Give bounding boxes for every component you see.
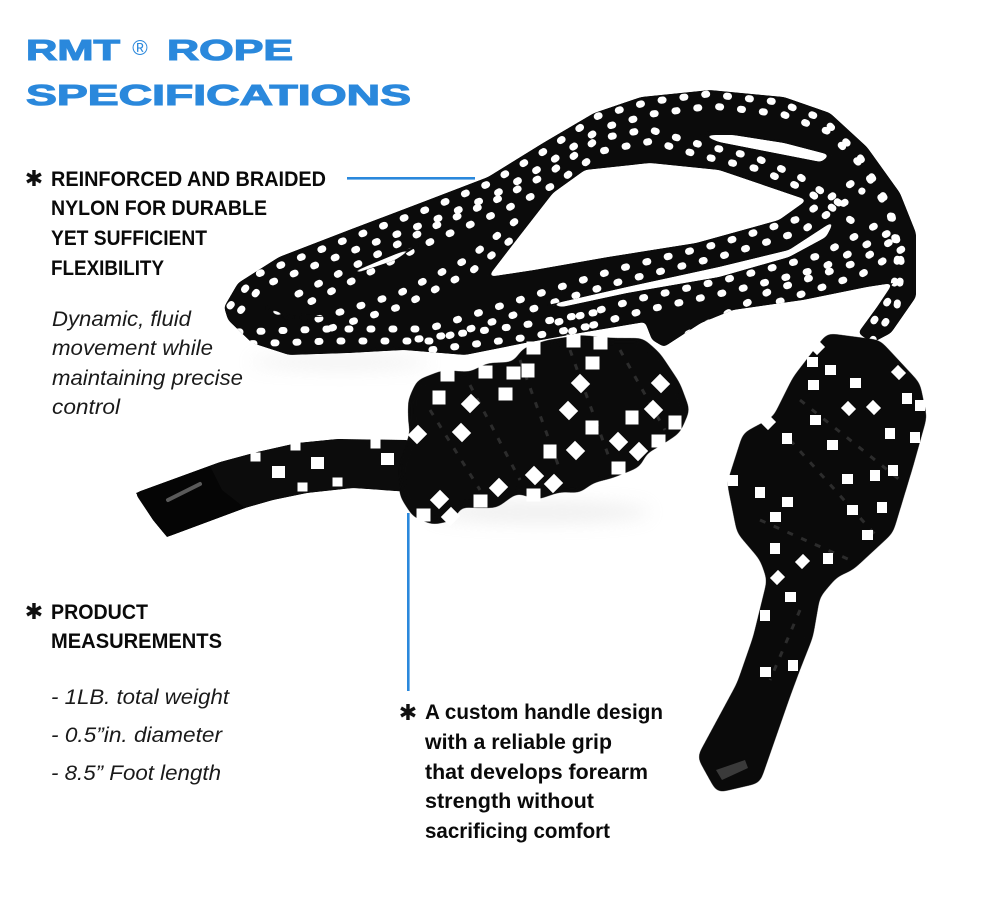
title: SPECIFICATIONS xyxy=(26,80,411,112)
heading: measurements: PRODUCT xyxy=(51,601,148,624)
callout line: braid xyxy=(347,177,475,180)
title: ® xyxy=(132,37,148,60)
description: handle: strength without xyxy=(425,790,594,813)
icon: asterisk: ✱ xyxy=(25,167,43,192)
heading: nylon: YET SUFFICIENT xyxy=(51,227,207,250)
handle knot and taped end, right xyxy=(697,333,927,793)
description: handle: that develops forearm xyxy=(425,761,648,784)
measurement list: - 1LB. total weight xyxy=(51,686,230,709)
heading: measurements xyxy=(51,601,222,653)
title: RMT xyxy=(26,35,120,67)
description: control xyxy=(52,396,121,419)
rope loops: black braided mass xyxy=(224,90,916,355)
soft shadows xyxy=(250,356,650,522)
heading: measurements: MEASUREMENTS xyxy=(51,630,222,653)
description: handle: A custom handle design xyxy=(425,701,663,724)
description: handle: sacrificing comfort xyxy=(425,820,610,843)
description: movement while xyxy=(52,337,213,360)
title: ROPE xyxy=(167,35,293,67)
icon: asterisk: ✱ xyxy=(399,701,417,726)
heading: nylon: NYLON FOR DURABLE xyxy=(51,197,267,220)
callout line: handle xyxy=(407,513,410,691)
heading: nylon: REINFORCED AND BRAIDED xyxy=(51,168,326,191)
handle knot, centre xyxy=(397,335,690,525)
text block: product measurements xyxy=(25,600,230,785)
rope photograph xyxy=(135,90,927,793)
text block: handle design xyxy=(399,701,663,843)
measurement list: - 0.5”in. diameter xyxy=(51,724,223,747)
measurement list xyxy=(51,686,230,785)
rope loops: white flecks xyxy=(230,94,907,351)
text block: nylon braid xyxy=(25,167,326,419)
description: maintaining precise xyxy=(52,367,243,390)
measurement list: - 8.5” Foot length xyxy=(51,762,221,785)
rope tail, left, with taped end xyxy=(135,439,410,537)
heading: nylon xyxy=(51,168,326,280)
heading: nylon: FLEXIBILITY xyxy=(51,257,164,280)
description: Dynamic, fluid xyxy=(52,308,192,331)
icon: asterisk: ✱ xyxy=(25,600,43,625)
description xyxy=(52,308,243,419)
title xyxy=(26,35,411,112)
description: handle xyxy=(424,701,663,843)
description: handle: with a reliable grip xyxy=(424,731,612,754)
